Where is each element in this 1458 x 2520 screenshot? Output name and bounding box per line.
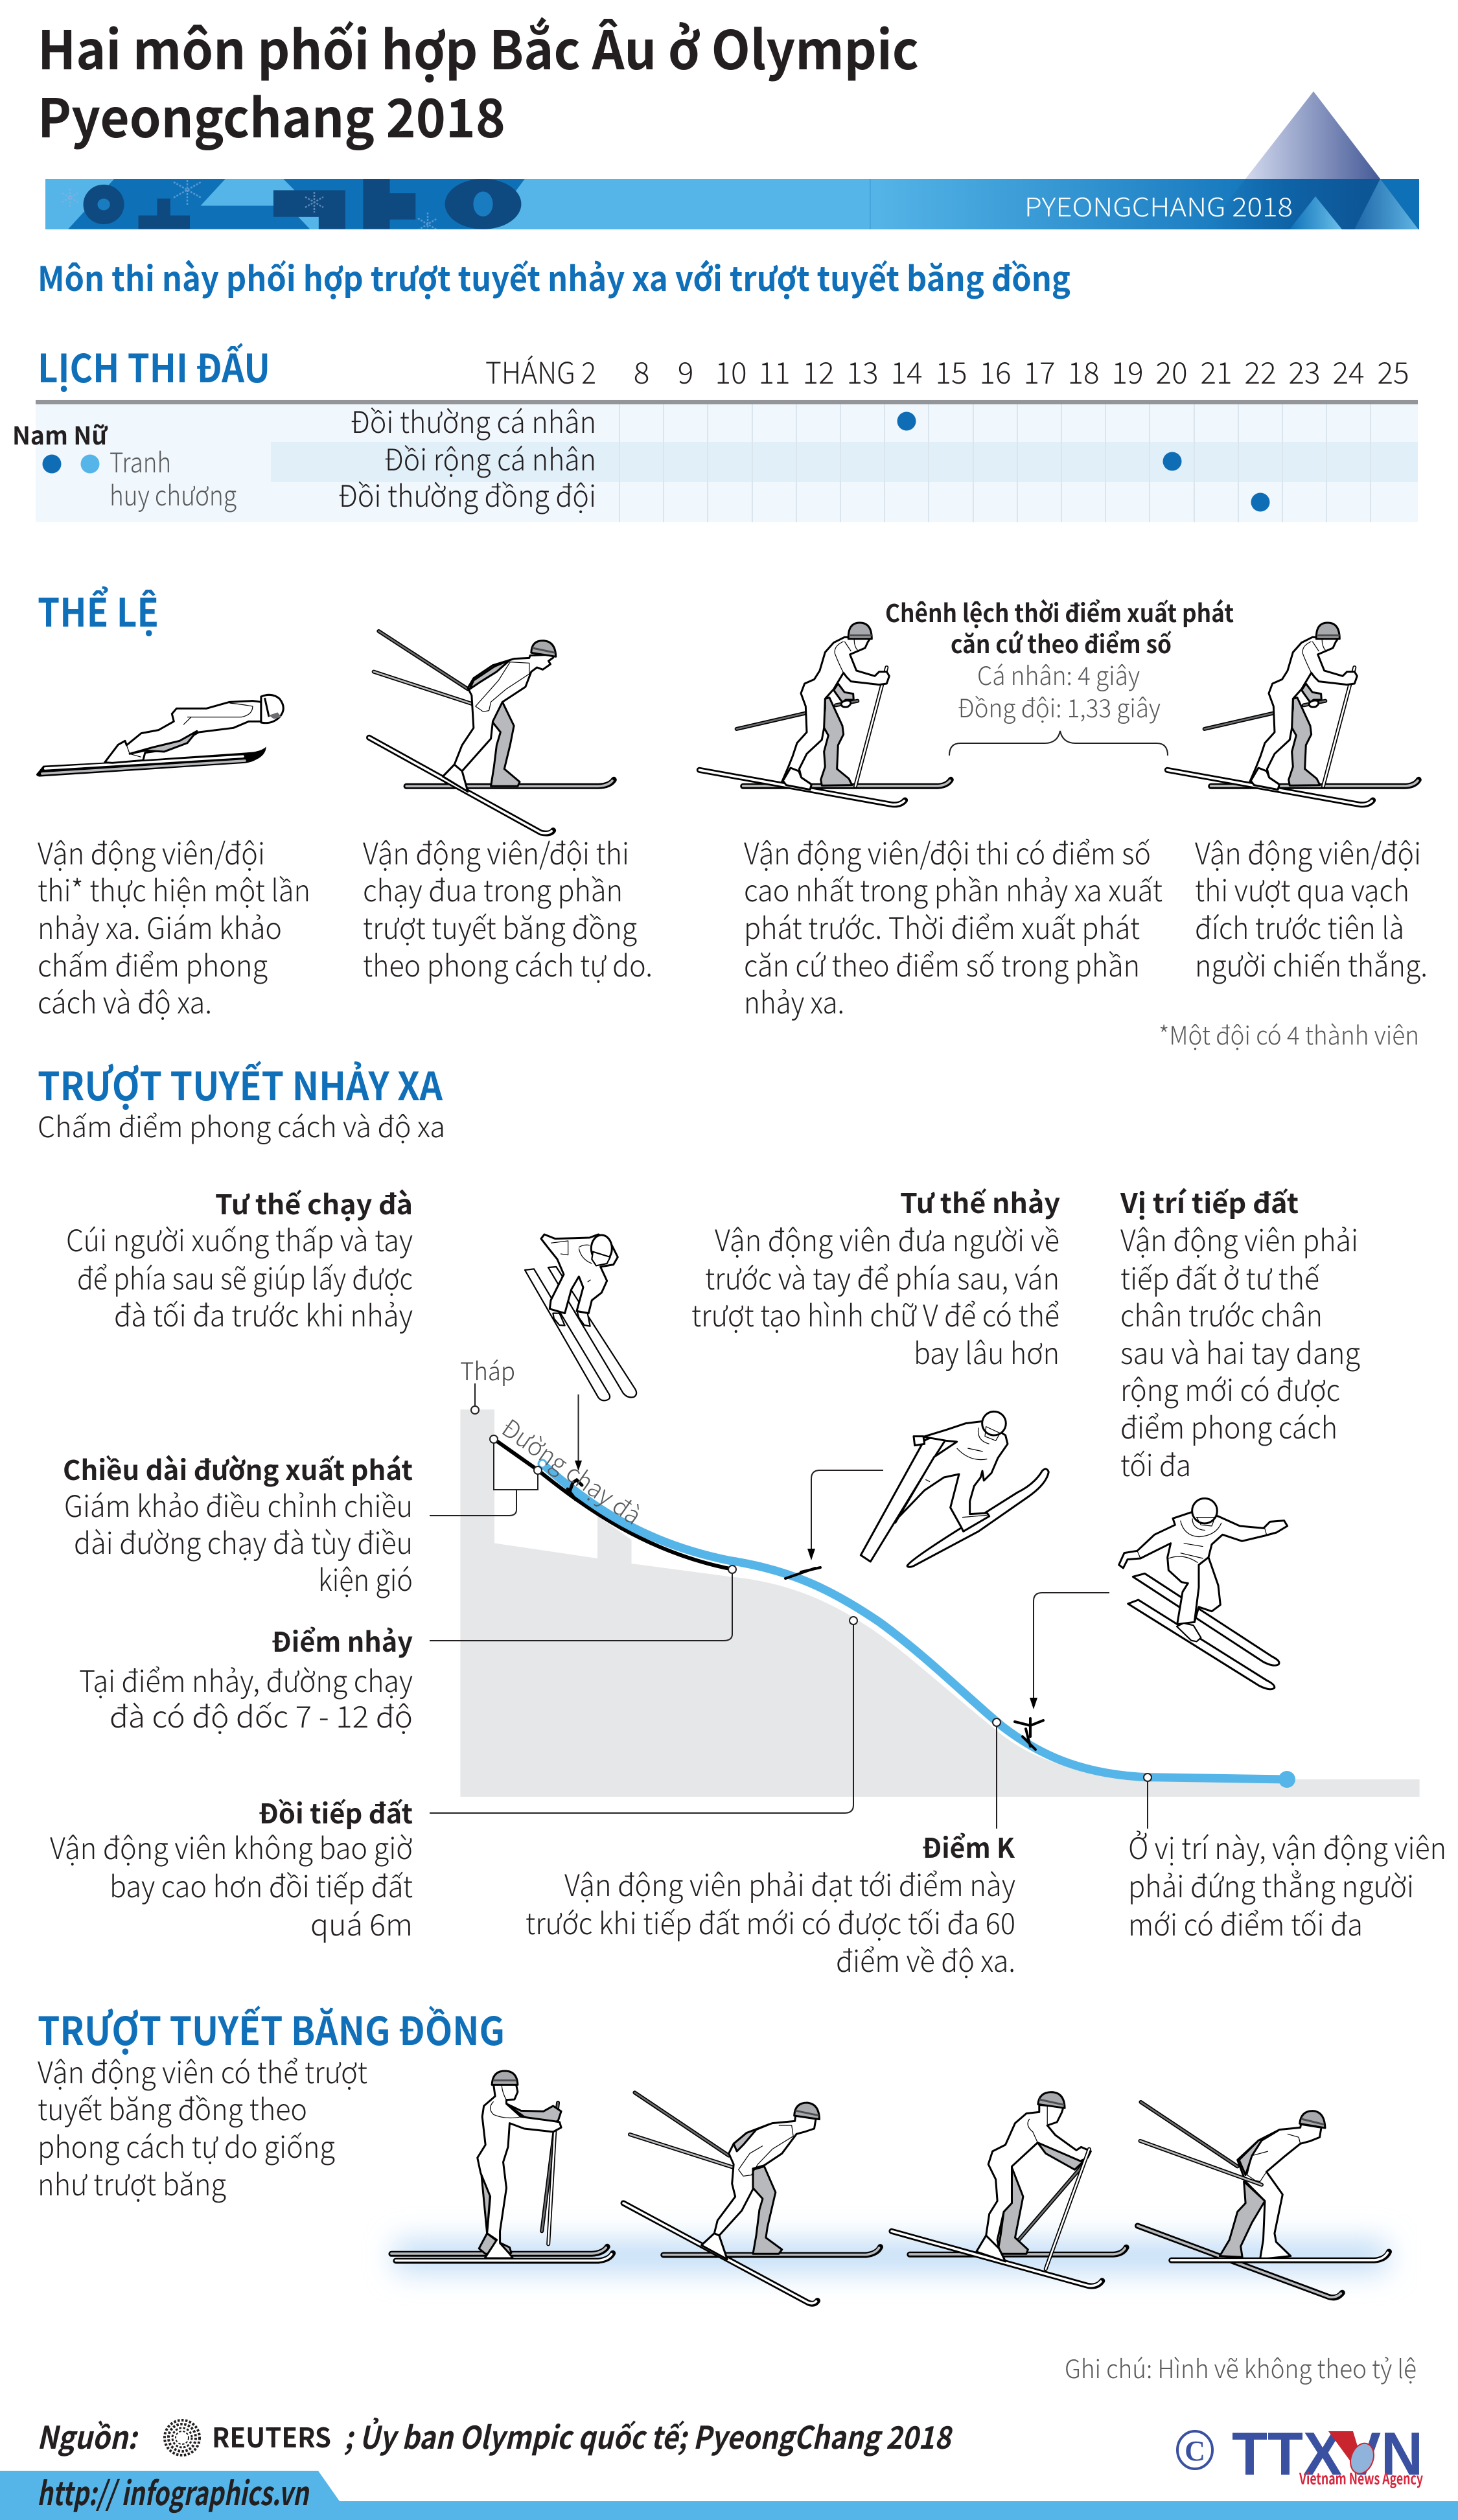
text: jump posture: trượt tạo hình chữ V để có thể [691, 1293, 1059, 1335]
text: outrun [1128, 1825, 1446, 1945]
text: jump posture: Tư thế nhảy [900, 1182, 1060, 1221]
text: rule 4: đích trước tiên là [1195, 905, 1404, 948]
callout: start time difference: Cá nhân: 4 giây [977, 656, 1140, 693]
text: K point: Vận động viên phải đạt tới điểm này [564, 1862, 1015, 1905]
text: rule 1: nhảy xa. Giám khảo [38, 905, 282, 948]
text: landing position: chân trước chân [1120, 1293, 1323, 1335]
text: run-up posture: đà tối đa trước khi nhảy [114, 1293, 413, 1335]
schedule table: 13 [846, 350, 879, 393]
schedule table: 20 [1155, 350, 1188, 393]
schedule table: 10 [715, 350, 747, 393]
note: not to scale: Ghi chú: Hình vẽ không theo tỷ lệ [1065, 2350, 1417, 2386]
text: rule 4 [1195, 831, 1428, 986]
text: jump posture: Vận động viên đưa người về [715, 1218, 1059, 1260]
icon: mini skier in-run [568, 1480, 582, 1499]
text: cross-country: tuyết băng đồng theo [38, 2087, 307, 2129]
icon: Reuters dots [165, 2420, 200, 2455]
callout: start time difference [885, 594, 1234, 756]
text: jump posture: trước và tay để phía sau, ván [705, 1256, 1059, 1299]
schedule table: 14 [890, 350, 923, 393]
schedule table: Đồi thường đồng đội [338, 473, 596, 516]
schedule table: 16 [979, 350, 1012, 393]
text: landing hill: Đồi tiếp đất [259, 1792, 413, 1832]
text: rule 3: nhảy xa. [744, 980, 844, 1023]
subtitle: Môn thi này phối hợp trượt tuyết nhảy xa với trượt tuyết băng đồng [38, 252, 1070, 301]
chart: hill profile [430, 1352, 1420, 1829]
schedule table: 11 [758, 350, 791, 393]
text: cross-country: Vận động viên có thể trượt [38, 2050, 367, 2092]
text: rule 1: thi* thực hiện một lần [38, 868, 310, 910]
text: landing position: sau và hai tay dang [1120, 1330, 1360, 1373]
text: rule 2: Vận động viên/đội thi [363, 831, 629, 873]
figures: cross-country skiers 3 and 4 [892, 2092, 1389, 2298]
text: rule 3: căn cứ theo điểm số trong phần [744, 943, 1140, 986]
banner: PYEONGCHANG 2018 [1024, 187, 1293, 224]
heading: schedule: LỊCH THI ĐẤU [38, 338, 270, 394]
legend: medals: Nam Nữ [12, 416, 108, 452]
legend: medals: huy chương [110, 474, 237, 514]
text: rule 1: Vận động viên/đội [38, 831, 265, 873]
figure: landing [1119, 1498, 1288, 1689]
text: K point [526, 1827, 1015, 1981]
text: rule 1 [38, 831, 310, 1023]
label: tower: Tháp [460, 1352, 515, 1387]
text: landing position [1120, 1182, 1360, 1485]
legend: medals: Tranh [110, 441, 171, 481]
heading: rules: THỂ LỆ [38, 582, 159, 638]
subheading: ski jumping: Chấm điểm phong cách và độ xa [38, 1104, 445, 1146]
text: landing position: tiếp đất ở tư thế [1120, 1256, 1319, 1299]
text: start length: dài đường chạy đà tùy điều [74, 1520, 413, 1563]
text: landing hill: quá 6m [310, 1902, 413, 1945]
text: outrun: phải đứng thẳng người [1128, 1864, 1414, 1906]
label: in-run: Đường chạy đà [496, 1409, 650, 1532]
text: rule 3: Vận động viên/đội thi có điểm số [744, 831, 1151, 873]
schedule table: Đồi rộng cá nhân [384, 437, 596, 480]
text: landing hill: Vận động viên không bao giờ [50, 1825, 413, 1868]
figure: skating skier [369, 631, 614, 833]
source line: REUTERS [212, 2416, 331, 2456]
text: jump posture: bay lâu hơn [914, 1330, 1059, 1373]
figure: ski jumper [36, 695, 283, 777]
text: K point: Điểm K [922, 1827, 1015, 1866]
text: landing position: Vận động viên phải [1120, 1218, 1358, 1260]
schedule table: 23 [1288, 350, 1321, 393]
text: rule 1: cách và độ xa. [38, 980, 212, 1023]
text: landing hill [50, 1792, 413, 1945]
schedule table: 25 [1377, 350, 1409, 393]
figures: cross-country skiers 1 and 2 [391, 2071, 880, 2304]
figure: in-run skier [525, 1234, 636, 1400]
banner [45, 179, 1419, 229]
text: landing position: tối đa [1120, 1442, 1191, 1485]
icon: mini skier flight [785, 1567, 820, 1578]
skier 4 [1137, 2102, 1389, 2298]
source line [37, 2412, 953, 2458]
text: rule 1: chấm điểm phong [38, 943, 268, 986]
title [38, 8, 919, 153]
schedule table: 15 [935, 350, 967, 393]
text: rule 2: trượt tuyết băng đồng [363, 905, 637, 948]
text: start length: kiện gió [318, 1557, 413, 1600]
icon: mini skier landing [1015, 1718, 1043, 1750]
footer band: http:// infographics.vn [37, 2468, 310, 2515]
skier 2 [623, 2092, 880, 2304]
text: rule 4: Vận động viên/đội [1195, 831, 1421, 873]
text: run-up posture: để phía sau sẽ giúp lấy được [77, 1256, 413, 1299]
text: jump point: Tại điểm nhảy, đường chạy [79, 1658, 413, 1701]
skier 1 [391, 2071, 613, 2261]
text: K point: điểm về độ xa. [836, 1938, 1015, 1981]
schedule table: 17 [1023, 350, 1056, 393]
heading: ski jumping: TRƯỢT TUYẾT NHẢY XA [38, 1056, 443, 1112]
schedule table: 9 [678, 350, 693, 393]
schedule table: 12 [802, 350, 835, 393]
text: run-up posture: Tư thế chạy đà [215, 1183, 413, 1223]
schedule table: 21 [1200, 350, 1232, 393]
schedule table [36, 350, 1418, 522]
skier 3 [892, 2092, 1126, 2286]
text: start length [63, 1449, 413, 1600]
footer band [0, 2468, 1458, 2520]
text: landing position: rộng mới có được [1120, 1367, 1340, 1410]
text: jump point: Điểm nhảy [272, 1621, 413, 1660]
text: cross-country: phong cách tự do giống [38, 2124, 335, 2167]
heading: cross-country: TRƯỢT TUYẾT BĂNG ĐỒNG [38, 2000, 505, 2057]
text: rule 2 [363, 831, 653, 986]
text: K point: trước khi tiếp đất mới có được tối đa 60 [526, 1901, 1015, 1943]
text: rule 2: theo phong cách tự do. [363, 943, 653, 986]
text: outrun: mới có điểm tối đa [1128, 1902, 1363, 1945]
text: landing position: điểm phong cách [1120, 1405, 1337, 1448]
text: jump point: đà có độ dốc 7 - 12 độ [110, 1694, 413, 1737]
title: Pyeongchang 2018 [38, 76, 505, 153]
text: rule 2: chạy đua trong phần [363, 868, 623, 910]
schedule table: Đồi thường cá nhân [351, 399, 596, 442]
figure: V-style flight [861, 1411, 1048, 1567]
schedule table: 8 [634, 350, 649, 393]
text: run-up posture [66, 1183, 413, 1335]
text: start length: Chiều dài đường xuất phát [63, 1449, 413, 1488]
logo: TTXVN: C [1185, 2435, 1205, 2467]
source line: Nguồn: [37, 2412, 139, 2458]
figure: skier start B [1167, 623, 1418, 805]
schedule table: 19 [1111, 350, 1144, 393]
schedule table: 22 [1244, 350, 1277, 393]
text: landing hill: bay cao hơn đồi tiếp đất [110, 1864, 413, 1906]
callout: start time difference: căn cứ theo điểm số [951, 625, 1172, 660]
title: Hai môn phối hợp Bắc Âu ở Olympic [38, 8, 919, 85]
text: start length: Giám khảo điều chỉnh chiều [64, 1483, 413, 1526]
icon: mountain peak [1245, 91, 1380, 179]
schedule table: THÁNG 2 [485, 350, 596, 393]
text: jump posture [691, 1182, 1060, 1373]
schedule table: 18 [1067, 350, 1100, 393]
text: rule 3 [744, 831, 1163, 1023]
text: landing position: Vị trí tiếp đất [1120, 1182, 1299, 1221]
callout: start time difference: Đồng đội: 1,33 giây [958, 689, 1161, 725]
callout: start time difference: Chênh lệch thời điểm xuất phát [885, 594, 1234, 629]
text: cross-country [38, 2050, 367, 2204]
source line: ; Ủy ban Olympic quốc tế; PyeongChang 2018 [344, 2412, 953, 2458]
text: run-up posture: Cúi người xuống thấp và tay [66, 1218, 413, 1260]
text: rule 4: thi vượt qua vạch [1195, 868, 1409, 910]
text: rule 3: cao nhất trong phần nhảy xa xuất [744, 868, 1163, 910]
text: jump point [79, 1621, 413, 1737]
schedule table: 24 [1332, 350, 1365, 393]
text: cross-country: như trượt băng [38, 2162, 226, 2204]
footnote: *Một đội có 4 thành viên [1159, 1016, 1419, 1052]
figure: skier start A [699, 623, 951, 805]
legend: medals [12, 416, 237, 514]
text: rule 3: phát trước. Thời điểm xuất phát [744, 905, 1140, 948]
text: rule 4: người chiến thắng. [1195, 943, 1428, 986]
logo: TTXVN: TTXVN [1232, 2420, 1423, 2488]
snow glow [395, 2241, 1387, 2272]
